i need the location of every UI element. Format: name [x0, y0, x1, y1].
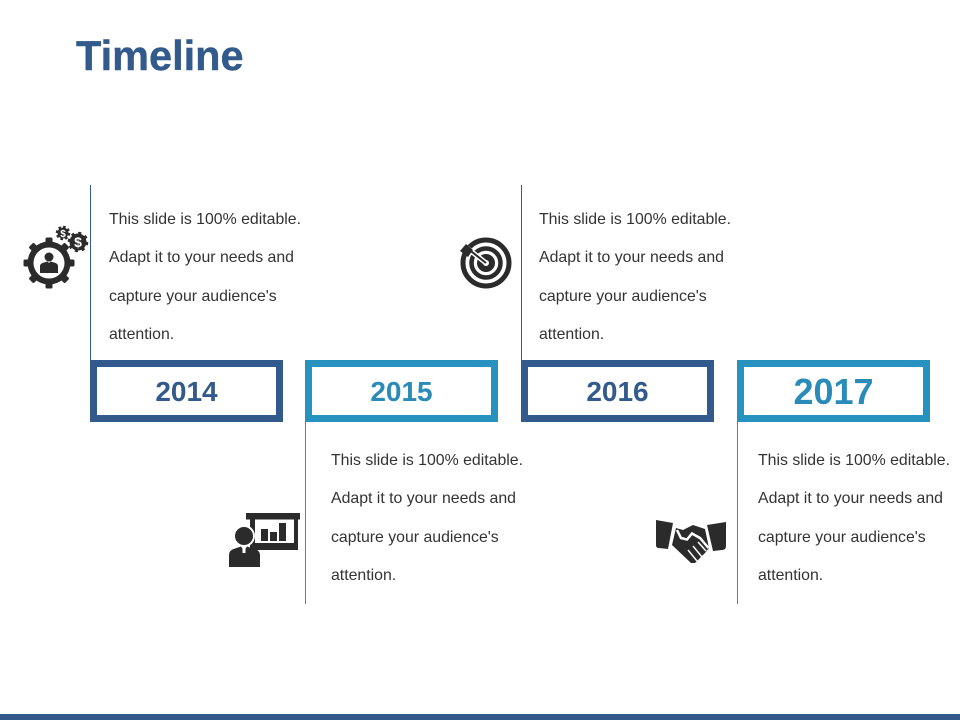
year box 2016: 2016	[586, 376, 649, 407]
connector line 2016	[521, 185, 522, 361]
connector line 2014	[90, 185, 91, 361]
footer bar	[0, 714, 960, 720]
icon: target with arrow	[460, 238, 512, 288]
text block 2016	[539, 211, 731, 343]
text block 2014	[109, 211, 301, 343]
year box 2014: 2014	[155, 376, 218, 407]
connector line 2017	[737, 421, 738, 604]
text block 2015: capture your audience's	[331, 529, 499, 546]
text block 2017: Adapt it to your needs and	[758, 490, 943, 507]
text block 2014: capture your audience's	[109, 288, 277, 305]
icon: presenter with chart board	[229, 513, 300, 567]
year box 2015	[305, 360, 498, 422]
text block 2015: attention.	[331, 567, 396, 584]
year box 2016	[521, 360, 714, 422]
text block 2016: attention.	[539, 326, 604, 343]
text block 2014: attention.	[109, 326, 174, 343]
text block 2016: This slide is 100% editable.	[539, 211, 731, 228]
text block 2016: Adapt it to your needs and	[539, 249, 724, 266]
title: Timeline	[76, 32, 244, 79]
year box 2017: 2017	[793, 371, 874, 412]
connector line 2015	[305, 421, 306, 604]
text block 2017: attention.	[758, 567, 823, 584]
text block 2015	[331, 452, 523, 584]
text block 2015: Adapt it to your needs and	[331, 490, 516, 507]
text block 2017: capture your audience's	[758, 529, 926, 546]
text block 2017	[758, 452, 950, 584]
icon: gear with person and dollar coins	[24, 226, 88, 288]
icon: gear with person and dollar coins: $	[74, 234, 82, 250]
text block 2017: This slide is 100% editable.	[758, 452, 950, 469]
text block 2015: This slide is 100% editable.	[331, 452, 523, 469]
text block 2014: This slide is 100% editable.	[109, 211, 301, 228]
year box 2014	[90, 360, 283, 422]
year box 2015: 2015	[370, 376, 433, 407]
icon: gear with person and dollar coins: $	[60, 229, 66, 240]
text block 2014: Adapt it to your needs and	[109, 249, 294, 266]
year box 2017	[737, 360, 930, 422]
icon: handshake	[656, 520, 726, 563]
text block 2016: capture your audience's	[539, 288, 707, 305]
